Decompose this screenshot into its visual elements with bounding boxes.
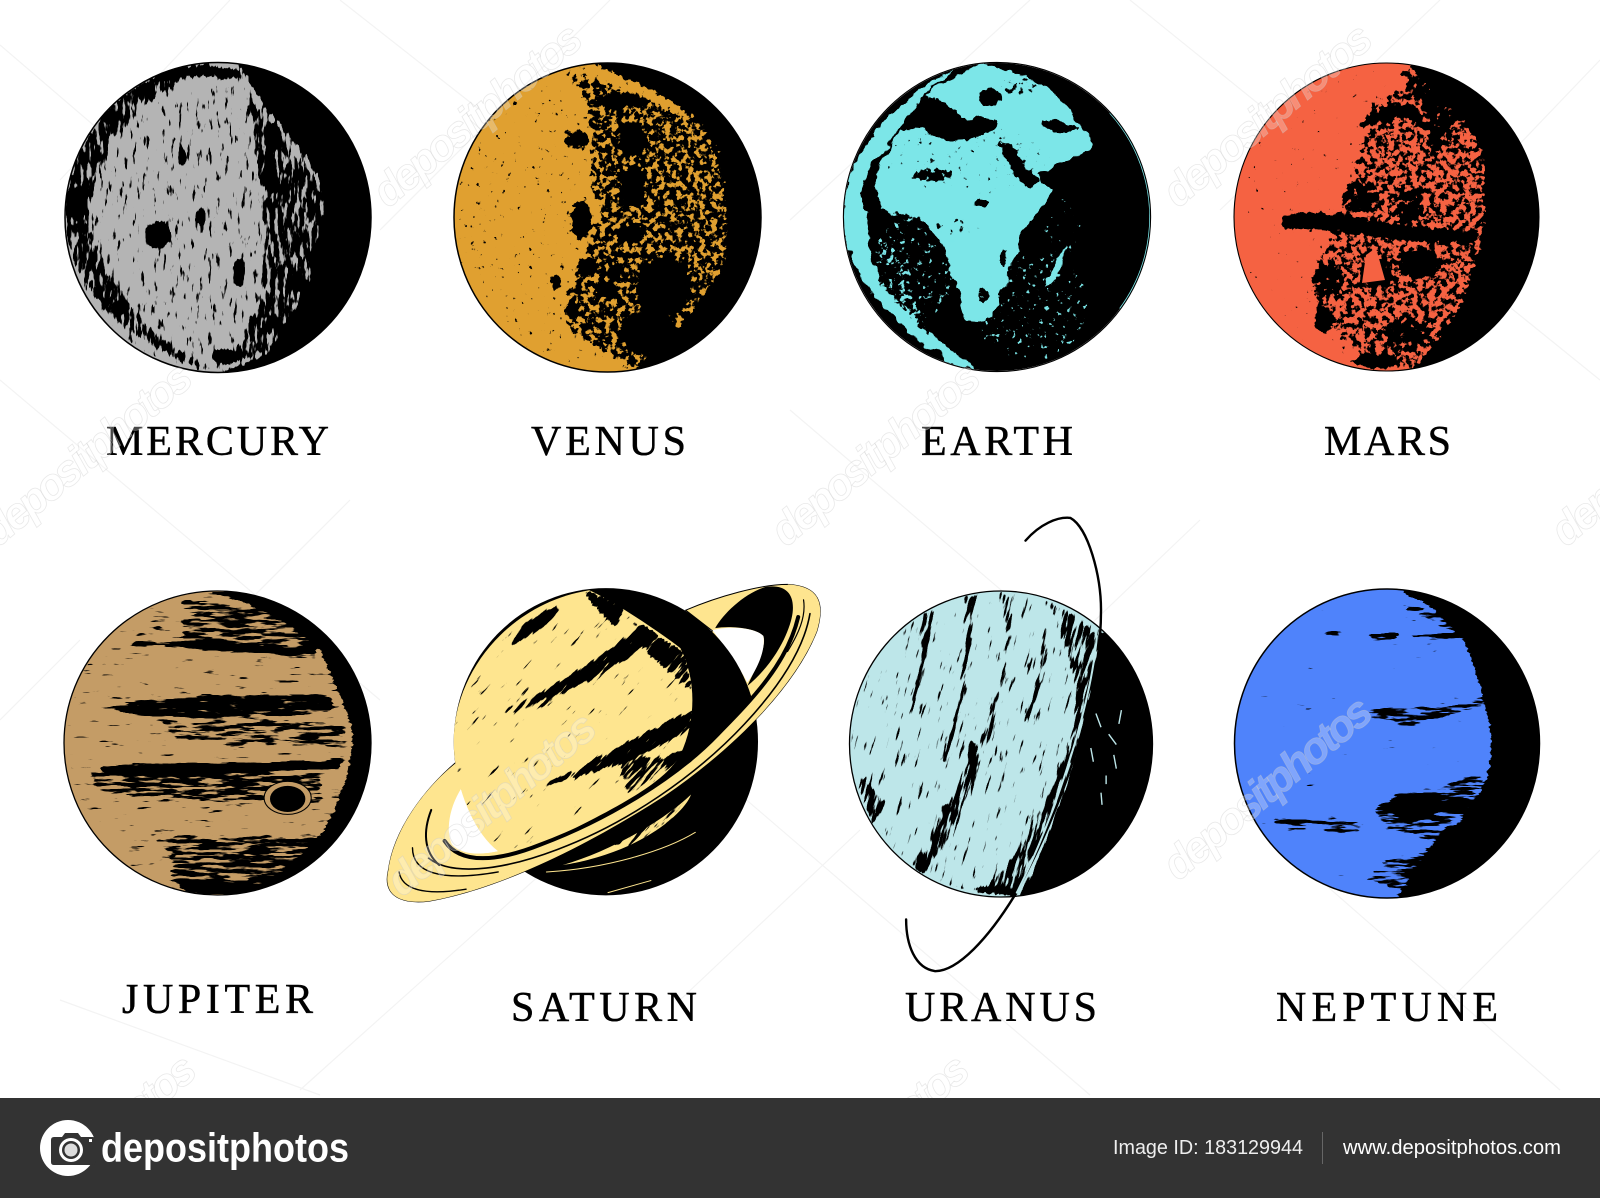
Venus outline <box>454 63 761 372</box>
watermark text: depositphotos <box>363 13 592 217</box>
Uranus ring <box>906 518 1101 971</box>
Earth rim highlight <box>1110 113 1150 309</box>
Mars label: MARS <box>1324 419 1451 465</box>
Uranus outline <box>850 591 1152 897</box>
Mercury outline <box>65 62 371 372</box>
Neptune outline <box>1234 589 1540 898</box>
logo: wordmark: depositphotos <box>101 1124 349 1170</box>
watermark text: depositphotos <box>761 352 990 556</box>
Jupiter outline <box>64 591 371 895</box>
watermark text: depositphotos <box>377 702 606 906</box>
footer divider <box>1322 1132 1323 1164</box>
planet: Earth <box>843 62 1151 465</box>
planet: Saturn <box>386 584 821 1022</box>
footer bar <box>0 1098 1600 1198</box>
Mars red disc <box>1234 63 1539 371</box>
Mars light patch <box>1362 248 1385 283</box>
planet: Mars <box>1233 62 1540 456</box>
Mercury etched surface and shadow <box>66 64 370 372</box>
Neptune blue disc <box>1234 589 1540 898</box>
Mars etched surface and shadow <box>1247 66 1538 370</box>
Earth outline <box>843 62 1151 372</box>
Saturn lit hemisphere <box>454 590 692 851</box>
Earth light specks in the dark seas <box>871 193 1091 362</box>
Earth black disc <box>844 63 1150 371</box>
website: www.depositphotos.com <box>1342 1137 1561 1159</box>
Venus label: VENUS <box>531 419 686 465</box>
Saturn lower lit fringe <box>562 794 691 865</box>
Saturn ring grooves <box>399 600 810 893</box>
logo: camera badge <box>40 1120 96 1176</box>
Venus etched surface and shadow <box>459 64 760 369</box>
Uranus streaks and shadow <box>850 592 1152 896</box>
watermark text: depositphotos <box>1153 686 1382 890</box>
Jupiter cloud bands and shadow <box>68 592 370 894</box>
planet: Venus <box>453 62 762 456</box>
Uranus label: URANUS <box>905 985 1097 1031</box>
Jupiter great red spot <box>264 781 311 814</box>
Uranus shadow craters <box>1091 710 1121 805</box>
Saturn label: SATURN <box>511 985 697 1031</box>
planet: Uranus <box>848 516 1154 1022</box>
planet: Jupiter <box>63 590 372 1014</box>
Saturn ring shadow <box>715 586 793 686</box>
watermark text: depositphotos <box>1153 13 1382 217</box>
Earth label: EARTH <box>921 419 1073 465</box>
Jupiter tan disc <box>64 591 371 895</box>
Saturn ring gap right <box>712 628 764 683</box>
Mercury grey disc <box>65 62 371 372</box>
Mercury label: MERCURY <box>106 419 329 465</box>
Saturn rear ring <box>387 584 820 902</box>
planet: Mercury <box>64 62 372 456</box>
Venus orange disc <box>454 63 761 372</box>
Uranus pale disc <box>850 591 1152 897</box>
planet: Neptune <box>1234 588 1540 1022</box>
Jupiter label: JUPITER <box>122 977 313 1023</box>
Neptune streaks and shadow <box>1261 590 1539 897</box>
Earth continents and rim <box>843 65 1091 370</box>
image id: Image ID: 183129944 <box>1113 1137 1303 1159</box>
Saturn black globe <box>454 588 758 895</box>
Saturn cloud streaks <box>454 591 692 848</box>
Neptune label: NEPTUNE <box>1276 985 1498 1031</box>
Earth sea blots <box>877 77 1081 337</box>
Saturn ring gap left <box>449 788 501 854</box>
Saturn front ring <box>387 584 820 902</box>
Mars outline <box>1234 63 1539 371</box>
